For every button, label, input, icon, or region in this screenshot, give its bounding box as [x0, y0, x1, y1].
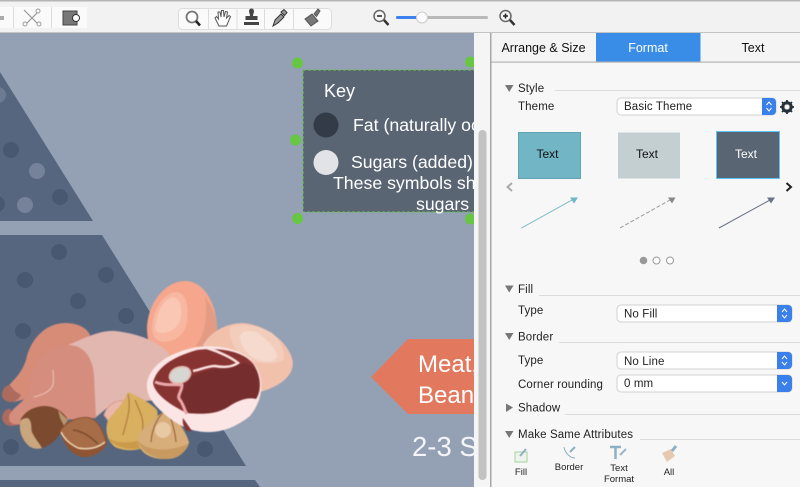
scrollbar	[474, 33, 492, 487]
callout arrow: meat and beans: Beans	[418, 382, 486, 409]
key swatch: fat	[314, 112, 338, 138]
body	[68, 331, 171, 418]
icon: border attribute: Border	[555, 462, 583, 473]
icon: all attributes	[662, 446, 676, 478]
icon: magnifier	[186, 12, 200, 26]
back foot	[2, 385, 21, 402]
section: fill	[505, 284, 800, 322]
key panel: Key	[324, 81, 355, 101]
icon: chestnut	[20, 406, 68, 449]
callout arrow: meat and beans: Meat,	[418, 351, 478, 378]
selection handles	[290, 56, 476, 224]
icon: pale egg	[203, 323, 293, 392]
theme swatch 1: Text	[536, 147, 559, 161]
key panel: sugars	[416, 194, 469, 214]
pyramid tier: bottom	[0, 480, 260, 487]
theme swatch 2: Text	[636, 147, 659, 161]
section: shadow: Shadow	[518, 402, 561, 414]
key panel	[302, 70, 474, 214]
arrow sample 3	[719, 198, 775, 228]
key swatch: sugars	[314, 150, 338, 175]
arrow sample 2	[620, 198, 676, 228]
icon: text format attribute	[604, 447, 634, 485]
icon: border attribute	[555, 447, 583, 473]
section: border: Type	[518, 355, 543, 367]
icon: walnut gold	[106, 392, 158, 450]
canvas	[0, 33, 474, 487]
section: border: Corner rounding	[518, 379, 603, 391]
icon: chicken	[2, 323, 171, 426]
select: theme	[617, 98, 776, 115]
steak outer fat	[147, 346, 261, 432]
icon: gear	[780, 100, 794, 114]
icon: steak	[147, 346, 261, 432]
select: border type	[617, 352, 792, 369]
toolbar group: view tools	[178, 8, 332, 30]
chevron left	[508, 183, 512, 191]
front foot	[2, 409, 20, 426]
theme swatch 2	[618, 132, 680, 178]
section: style: Style	[518, 83, 544, 95]
vein	[193, 348, 238, 371]
section: border: Border	[518, 332, 553, 344]
section: style: Theme	[518, 101, 554, 113]
icon: fill attribute: Fill	[515, 467, 527, 478]
tabs: Text	[742, 41, 765, 55]
back leg	[3, 323, 95, 402]
pyramid tier: meat and beans	[0, 235, 246, 466]
key panel: Fat (naturally occurring)	[353, 115, 540, 135]
servings label: 2-3 Servings	[412, 431, 566, 462]
select: border type: No Line	[624, 356, 665, 368]
select: theme: Basic Theme	[624, 101, 692, 113]
section: make same attributes	[505, 429, 800, 485]
select: corner rounding	[617, 375, 792, 392]
section: make same attributes: Make Same Attributes	[518, 429, 633, 441]
section: shadow	[506, 402, 800, 415]
icon: walnut tan	[138, 407, 189, 459]
icon: brown egg	[146, 280, 218, 356]
pyramid tier: top	[0, 72, 93, 221]
section: fill: Fill	[518, 284, 533, 296]
icon: all attributes: All	[664, 467, 674, 478]
tabs: Arrange & Size	[501, 41, 586, 55]
pager dots	[640, 257, 674, 264]
icon: hazelnut	[60, 417, 107, 457]
icon: text format attribute: Format	[604, 474, 634, 485]
section: style	[505, 83, 800, 264]
icon: dropper	[273, 10, 287, 26]
select: corner rounding: 0 mm	[624, 378, 653, 390]
key panel: These symbols show fats and	[333, 173, 566, 193]
corner under fat	[183, 418, 192, 431]
arrow sample 1	[522, 198, 578, 228]
tabs	[492, 33, 800, 63]
meat	[153, 349, 260, 414]
chevron right	[786, 183, 791, 191]
icon: hand	[215, 10, 230, 26]
icon: text format attribute: Text	[610, 463, 628, 474]
front leg	[9, 345, 96, 424]
select: fill type	[617, 305, 792, 322]
tabs: Format	[628, 41, 668, 55]
icon: fill attribute	[515, 449, 527, 478]
key panel: Sugars (added)	[351, 152, 473, 172]
toolbar	[0, 0, 800, 34]
pink seam	[155, 382, 187, 414]
theme swatch 3: Text	[735, 147, 758, 161]
callout arrow: meat and beans	[371, 339, 474, 414]
select: fill type: No Fill	[624, 308, 658, 320]
meat darker	[181, 363, 259, 414]
section: fill: Type	[518, 305, 543, 317]
format panel	[492, 33, 800, 487]
food group	[2, 281, 293, 459]
theme swatch 1	[518, 132, 580, 178]
toolbar group: diagram tools	[0, 7, 87, 28]
icon: stamp	[244, 8, 259, 25]
section: border	[505, 332, 800, 392]
zoom slider	[374, 10, 514, 25]
icon: brush	[305, 9, 320, 26]
theme swatch 3	[716, 132, 780, 178]
